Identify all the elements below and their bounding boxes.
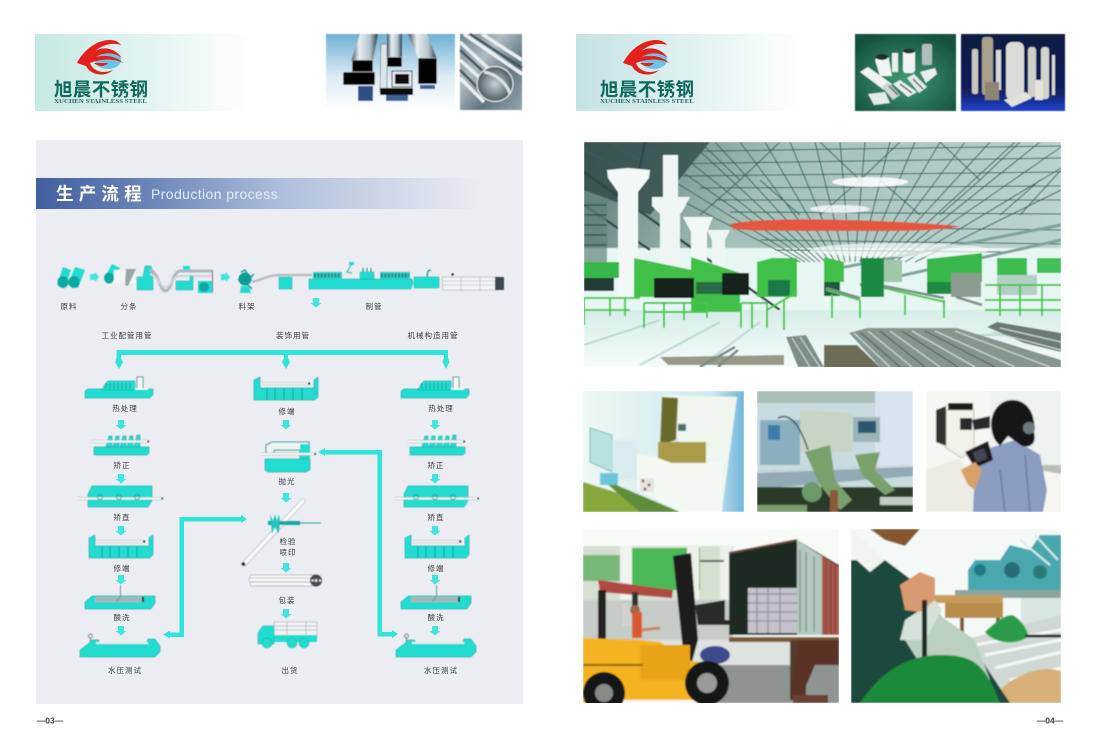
icon: packaged tube bundle [249, 574, 322, 586]
arrow [116, 626, 126, 636]
photo: round steel tube [460, 34, 522, 110]
steel pipe stacks [786, 335, 824, 367]
column: decorative tube [242, 377, 322, 648]
label: raw material: 原料 [60, 301, 78, 311]
icon: material rack [238, 270, 254, 293]
machine: pickling [401, 585, 471, 609]
machine: pickling [85, 585, 155, 609]
arrow [280, 563, 292, 572]
left page header banner [35, 34, 253, 111]
icon: company logo swoosh [77, 40, 123, 75]
jacket [851, 560, 1010, 703]
company name: 旭晨不锈钢 [600, 79, 694, 100]
green forms [860, 655, 1000, 703]
icon: sizing box [414, 270, 439, 288]
tube feed line [252, 275, 312, 282]
machine: polishing [261, 442, 316, 472]
heading english: Production process [151, 186, 278, 202]
machinery [968, 535, 1061, 592]
photo: laboratory analyser [583, 391, 745, 512]
icon: caliper inspection [242, 501, 321, 566]
arrow [430, 474, 440, 484]
arrow [280, 493, 292, 502]
panel: production process [36, 140, 523, 704]
table [935, 595, 1003, 603]
label: trimming: 修端 [114, 563, 130, 573]
label: industrial piping: 工业配管用管 [102, 330, 152, 340]
machine: hydraulic test [80, 634, 160, 657]
icon: slitting line [104, 264, 213, 293]
label: heat treatment: 热处理 [112, 403, 138, 413]
conveyor frames [584, 285, 1061, 330]
machine: straight rolling [394, 486, 479, 507]
arrow [90, 272, 99, 282]
label: hydraulic test: 水压测试 [424, 665, 458, 675]
arrow [116, 575, 126, 584]
arrow [430, 420, 440, 430]
arrow down from tube mill [310, 298, 322, 308]
arrow [116, 420, 126, 430]
arrow [116, 474, 126, 484]
label: hydraulic test: 水压测试 [108, 665, 142, 675]
machine: hydraulic test [396, 634, 476, 657]
label: slitting: 分条 [120, 301, 138, 311]
container [729, 540, 839, 635]
tubes [972, 616, 1061, 690]
floor [584, 310, 1061, 367]
machine: end trimming [254, 377, 318, 400]
label: material rack: 料架 [238, 301, 256, 311]
arrow: hydraulic test to polishing [318, 448, 398, 638]
green machines [584, 253, 1061, 312]
arrow [280, 609, 292, 618]
label: pickling: 酸洗 [114, 612, 130, 622]
forklift [598, 580, 673, 598]
label: shipping: 出货 [282, 665, 298, 675]
arrow [221, 272, 230, 282]
icon: feed block [279, 277, 292, 289]
arrow [430, 526, 440, 536]
machine: heat treatment [401, 377, 469, 398]
label: inspection: 检验 [280, 536, 296, 546]
icon: company logo swoosh [623, 40, 669, 75]
machine: straightening [91, 435, 149, 455]
arrow [430, 626, 440, 636]
machine: straightening [407, 435, 465, 455]
arrow [280, 420, 292, 430]
flow: raw material to tube making [57, 262, 504, 293]
column: mechanical structure tube [394, 377, 479, 657]
ground patches [660, 355, 784, 365]
icon: finished tube rack [442, 273, 504, 291]
heading chinese: 生产流程 [56, 184, 147, 204]
page number 03: —03— [37, 716, 64, 726]
icon: delivery truck [258, 622, 317, 648]
label: correction: 矫正 [428, 460, 444, 470]
photo: worker checking tubes [851, 529, 1061, 703]
photo: square steel tubes [326, 34, 455, 111]
photo: forklift loading container [583, 538, 839, 703]
machine: straight rolling [78, 486, 163, 507]
arrow: distribution bar [115, 350, 450, 369]
icon: raw material coils [57, 267, 85, 288]
label: straightening: 矫直 [114, 512, 130, 522]
label: correction: 矫正 [114, 460, 130, 470]
right page header banner [576, 34, 802, 111]
label: mechanical structure tube: 机械构造用管 [408, 330, 458, 340]
arrow [430, 575, 440, 584]
photo: profiled tubes on green [855, 34, 956, 111]
photo: factory workshop [584, 142, 1061, 368]
photo: round tubes on blue [961, 34, 1065, 111]
company name english: XUCHEN STAINLESS STEEL [600, 99, 694, 105]
photo: technician at microscope [926, 391, 1061, 512]
label: trimming: 修端 [278, 406, 296, 416]
crane [730, 219, 960, 231]
arrow [116, 526, 126, 536]
label: straightening: 矫直 [428, 512, 444, 522]
machine: end trimming [89, 535, 153, 558]
heading bar: production process [36, 178, 482, 209]
label: ink marking: 喷印 [280, 547, 296, 557]
label: pickling: 酸洗 [428, 612, 444, 622]
label: packaging: 包装 [278, 595, 296, 605]
roof truss lattice [584, 142, 1061, 262]
columns [607, 168, 650, 300]
column: industrial piping [78, 377, 163, 657]
company name english: XUCHEN STAINLESS STEEL [54, 99, 147, 105]
label: decorative tube: 装饰用管 [276, 330, 310, 340]
label: polishing: 抛光 [278, 476, 296, 486]
arrow: hydraulic test to inspection [163, 515, 247, 638]
machine: end trimming [405, 535, 469, 558]
label: trimming: 修端 [428, 563, 444, 573]
page number 04: —04— [1037, 716, 1064, 726]
company name: 旭晨不锈钢 [54, 79, 148, 100]
label: tube making: 制管 [366, 301, 382, 311]
photo: welding line equipment [757, 391, 913, 512]
machine: heat treatment [85, 377, 153, 398]
icon: tube mill [309, 262, 413, 289]
label: heat treatment: 热处理 [428, 403, 454, 413]
